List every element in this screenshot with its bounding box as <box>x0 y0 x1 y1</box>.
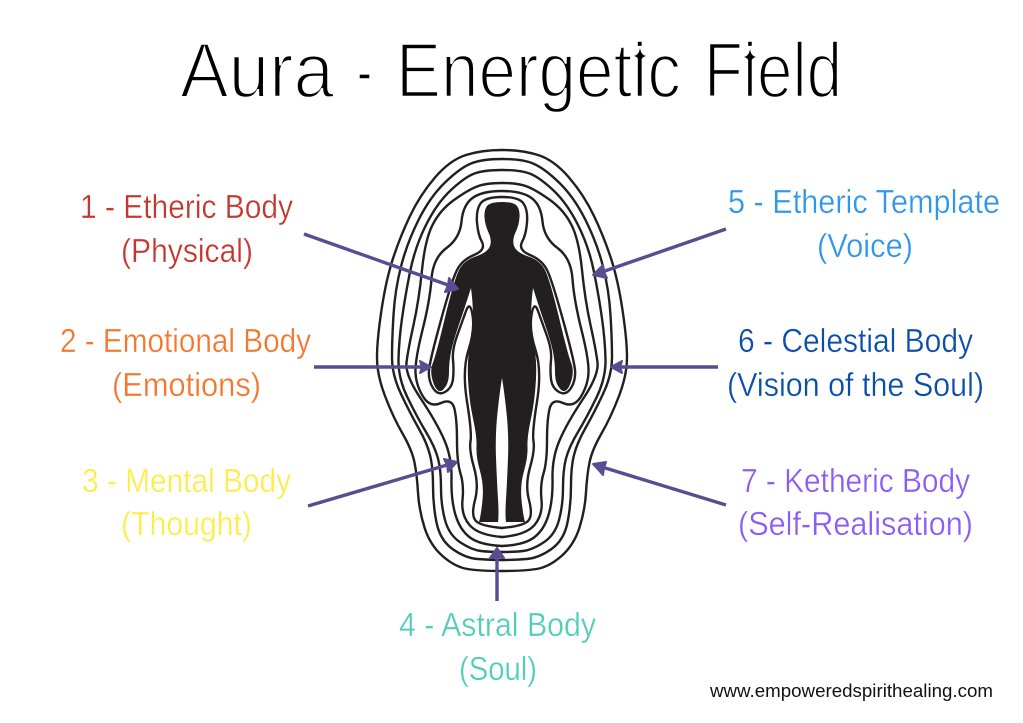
aura contour lines <box>377 150 502 571</box>
arrow: celestial body <box>611 361 718 373</box>
arrow: astral body <box>490 548 504 601</box>
label: celestial body: (Vision of the Soul) <box>727 366 984 403</box>
label: etheric body <box>80 188 293 269</box>
aura figure <box>377 150 627 571</box>
label: etheric template: 5 - Etheric Template <box>728 183 1000 220</box>
label: celestial body: 6 - Celestial Body <box>738 322 973 359</box>
title: - <box>357 26 372 114</box>
label: ketheric body <box>738 462 973 542</box>
website url: www.empoweredspirithealing.com <box>709 680 993 701</box>
arrow: etheric template <box>593 229 726 278</box>
label: etheric template: (Voice) <box>817 227 913 264</box>
title: Aura <box>180 26 335 114</box>
label: astral body <box>399 606 596 687</box>
label: astral body: 4 - Astral Body <box>399 606 596 643</box>
arrow: mental body <box>308 459 457 506</box>
arrow: emotional body <box>314 361 431 373</box>
body silhouette <box>431 202 502 522</box>
label: celestial body <box>727 322 984 403</box>
label: emotional body <box>60 322 311 403</box>
label: ketheric body: (Self-Realisation) <box>738 505 973 542</box>
title: Energetic <box>396 26 681 114</box>
label: etheric template <box>728 183 1000 264</box>
title: Field <box>704 26 842 114</box>
label: etheric body: (Physical) <box>121 232 253 269</box>
label: emotional body: (Emotions) <box>112 366 261 403</box>
arrow: ketheric body <box>593 462 726 505</box>
label: emotional body: 2 - Emotional Body <box>60 322 311 359</box>
label: mental body: (Thought) <box>121 505 252 542</box>
label: astral body: (Soul) <box>459 650 537 687</box>
label: mental body: 3 - Mental Body <box>82 462 291 499</box>
label: etheric body: 1 - Etheric Body <box>80 188 293 225</box>
arrow: etheric body <box>304 234 458 292</box>
title <box>180 26 842 114</box>
label: mental body <box>82 462 291 542</box>
label: ketheric body: 7 - Ketheric Body <box>741 462 970 499</box>
